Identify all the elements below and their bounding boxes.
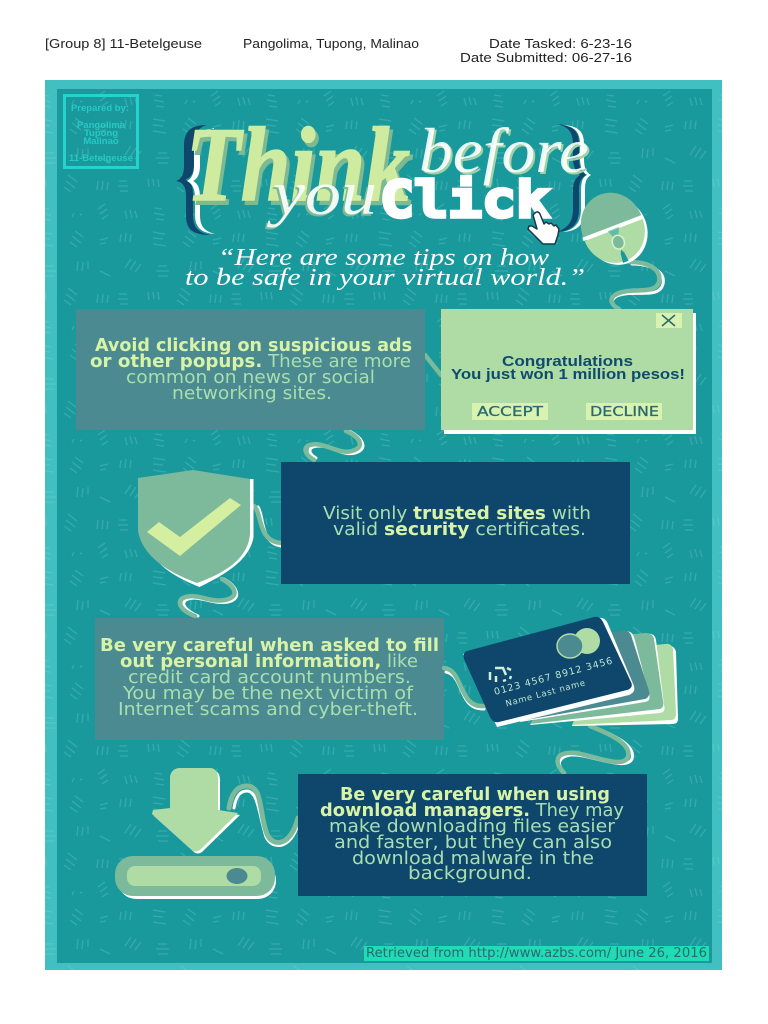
- quote: [185, 244, 585, 291]
- panel: download managers: [298, 774, 647, 896]
- panel: trusted sites: Visit only trusted sites with: [323, 504, 591, 524]
- card number: Name Last name: [505, 678, 586, 709]
- word: Think: Think: [186, 106, 410, 223]
- connector: panel 1 to panel 2: [305, 431, 363, 460]
- panel: personal information: Internet scams and cyber-theft.: [118, 700, 418, 720]
- panel: trusted sites: valid security certificates.: [333, 520, 586, 540]
- download cable: [229, 786, 298, 846]
- panel: download managers: background.: [408, 864, 532, 884]
- prepared by box: 11-Betelgeuse: [69, 153, 133, 164]
- panel: personal information: [95, 618, 444, 740]
- prepared by box: [64, 96, 138, 168]
- icon: mouse: [570, 183, 663, 309]
- left brace: [176, 125, 215, 235]
- source note: Retrieved from http://www.azbs.com/ June 26, 2016: [366, 946, 707, 961]
- panel: trusted sites: [281, 462, 630, 584]
- word: you: you: [264, 162, 375, 230]
- accept button: ACCEPT: [477, 404, 544, 420]
- poster background: [45, 80, 722, 970]
- connector: panel 1 to popup: [425, 355, 441, 375]
- header text: Date Tasked: 6-23-16: [489, 36, 632, 51]
- card cables: [444, 668, 633, 773]
- header text: [45, 36, 632, 65]
- shield cables: [180, 506, 281, 616]
- word: before: before: [419, 115, 589, 186]
- panel: download managers: make downloading files easier: [329, 817, 616, 837]
- popup message: [451, 353, 685, 383]
- popup message: You just won 1 million pesos!: [451, 366, 685, 383]
- quote: “Here are some tips on how: [218, 244, 550, 271]
- panel: avoid suspicious ads: or other popups. These are more: [90, 352, 411, 372]
- panel: personal information: Be very careful when asked to fill: [100, 636, 439, 656]
- popup message: Congratulations: [502, 353, 633, 370]
- panel: download managers: and faster, but they can also: [334, 833, 612, 853]
- icon: download: [115, 768, 298, 899]
- right brace: [556, 124, 591, 232]
- mouse cable: [612, 262, 663, 309]
- check mark: [147, 498, 241, 556]
- panel: avoid suspicious ads: networking sites.: [172, 384, 332, 404]
- panel: personal information: credit card account numbers.: [128, 668, 411, 688]
- panel: personal information: out personal information, like: [120, 652, 418, 672]
- accept button: [472, 403, 548, 420]
- popup window: [441, 309, 696, 434]
- arrow: [152, 768, 240, 854]
- icon: hand cursor: [528, 212, 559, 244]
- panel: download managers: Be very careful when using: [340, 785, 610, 805]
- panel: avoid suspicious ads: common on news or social: [126, 368, 375, 388]
- word: before: before: [421, 117, 591, 188]
- word: Think: Think: [189, 110, 413, 227]
- decline button: DECLINE: [590, 404, 659, 420]
- card chip: [557, 628, 600, 658]
- word: you: you: [266, 160, 377, 228]
- quote: to be safe in your virtual world.”: [185, 264, 585, 291]
- card number: 0123 4567 8912 3456: [493, 656, 614, 698]
- prepared by box: Prepared by:: [71, 103, 129, 114]
- header text: Date Submitted: 06-27-16: [460, 50, 632, 65]
- back cards: [572, 646, 678, 726]
- progress bar: [115, 856, 276, 899]
- front card: [464, 617, 632, 722]
- prepared by box: Tupong: [84, 128, 118, 139]
- icon: shield: [138, 470, 281, 616]
- prepared by box: Malinao: [83, 136, 119, 147]
- header text: Pangolima, Tupong, Malinao: [243, 36, 419, 51]
- title: [176, 106, 591, 235]
- panel: download managers: download malware in the: [352, 849, 594, 869]
- word: Click: Click: [380, 171, 550, 229]
- header text: [Group 8] 11-Betelgeuse: [45, 36, 202, 51]
- close button: [656, 313, 682, 328]
- card logo: [490, 668, 511, 682]
- prepared by box: Pangolima: [77, 120, 126, 131]
- panel: personal information: You may be the next victim of: [122, 684, 414, 704]
- panel: download managers: download managers. They may: [320, 801, 624, 821]
- icon: credit cards: [444, 617, 678, 773]
- panel: avoid suspicious ads: Avoid clicking on suspicious ads: [95, 336, 412, 356]
- panel: avoid suspicious ads: [76, 309, 425, 430]
